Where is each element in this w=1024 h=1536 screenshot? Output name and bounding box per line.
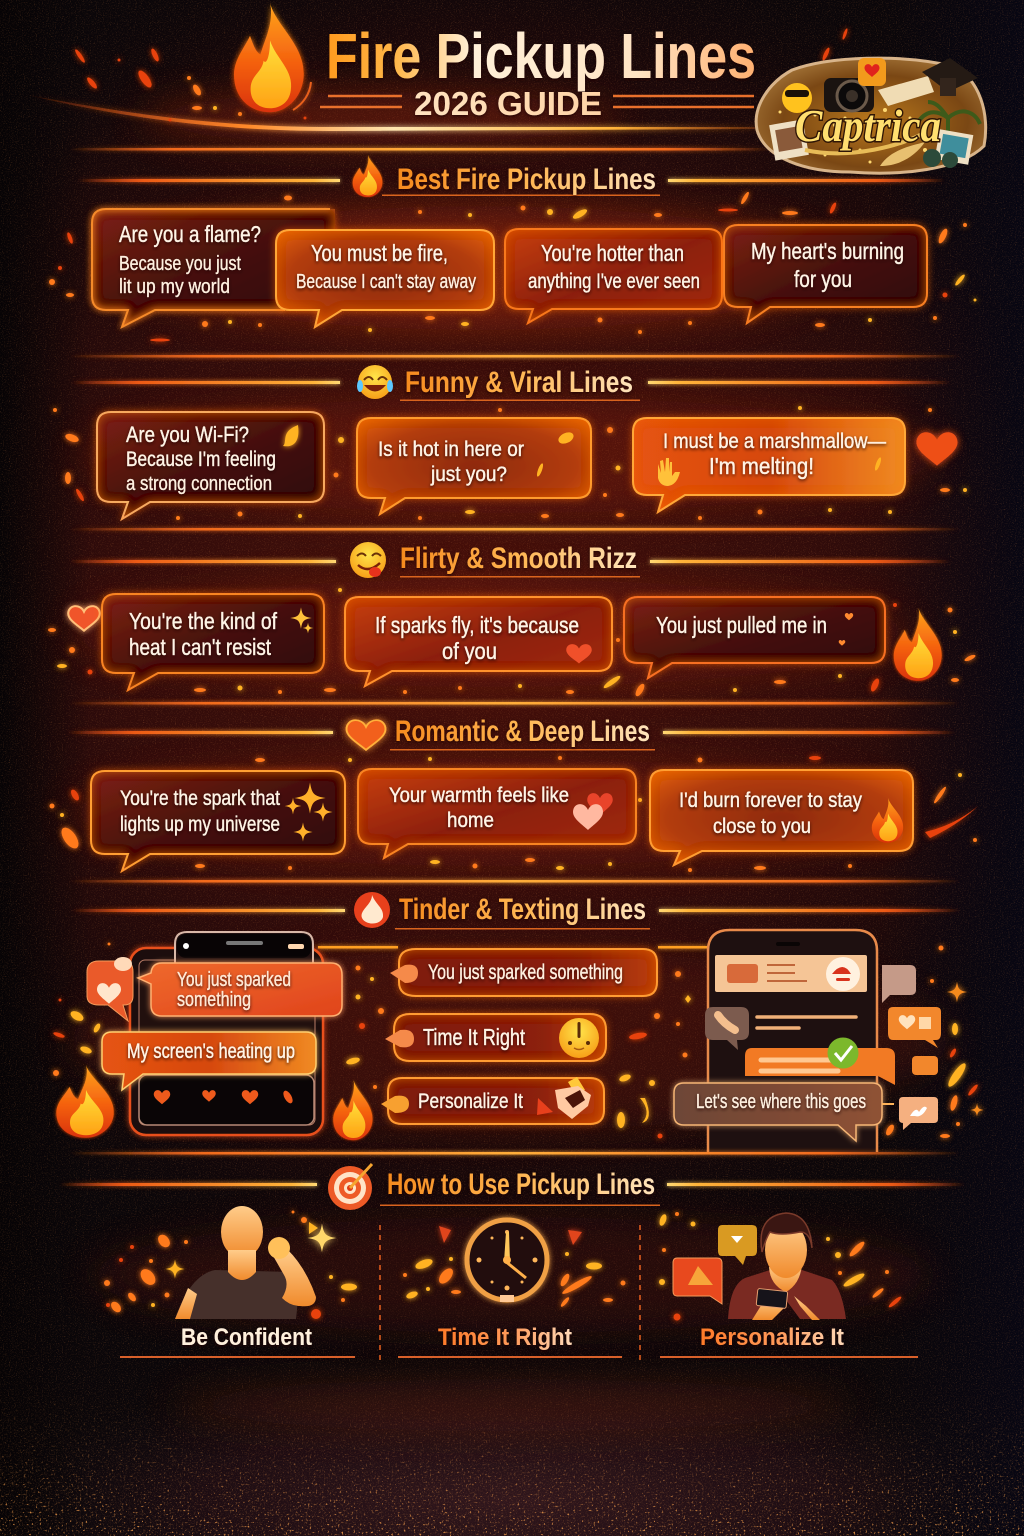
bubble: burn forever: I'd burn forever to stay [679,789,862,812]
divider [70,702,960,704]
swoosh line [28,95,760,131]
icon: main flame [234,3,311,112]
icon: phone call bubble [705,1007,749,1050]
bubble: middle 2 [385,1014,606,1061]
icon: alert emoji [559,1018,599,1058]
bubble: You just sparked something [138,963,342,1016]
section: Tinder & Texting Lines [53,880,984,1152]
hearts on phone [154,1089,295,1105]
label: Be Confident [181,1324,312,1351]
heading: How to Use Pickup Lines [387,1168,655,1201]
bubble: pulled me in: You just pulled me in [656,612,827,638]
subtitle: 2026 GUIDE [414,85,602,122]
heading [72,892,960,930]
bubble: My heart's burning [724,225,927,323]
bubble: My screen's heating up: My screen's heating up [127,1040,295,1063]
heading [68,715,955,750]
icon: hand [658,458,680,486]
heading [72,365,950,401]
heading [78,155,945,197]
bubble: warmth: home [447,809,494,832]
divider [70,880,960,882]
bubble: Are you Wi-Fi? [97,412,324,519]
icon: flame right [333,1080,372,1140]
bubble: You must be fire: Because I can't stay away [296,271,476,293]
bubble: middle 1: You just sparked something [428,961,623,984]
bubble: Let's see where this goes: Let's see where this goes [696,1091,866,1113]
title: Fire Pickup Lines [326,20,756,92]
label: Time It Right [438,1324,572,1351]
bubble: You just sparked something: something [177,989,251,1011]
column dividers [380,1225,640,1360]
logo: Captrica badge [756,58,986,173]
bubble: marshmallow: I'm melting! [709,453,814,479]
icon: check [828,1038,858,1068]
label: Personalize It [700,1324,844,1351]
bubble: kind of heat: You're the kind of [129,608,277,634]
divider [70,355,960,358]
embers [50,756,978,872]
bubble: You must be fire: You must be fire, [311,240,448,266]
embers [48,588,976,698]
embers [104,1210,902,1320]
bubble: pulled me in [624,597,885,678]
bubble: Is it hot in here: Is it hot in here or [378,438,524,461]
embers [53,942,984,1138]
embers [49,191,976,342]
bubble: sparks fly [345,597,612,686]
bubble: You just sparked something: You just sparked [177,969,291,991]
bubble: kind of heat [102,594,324,690]
bubble: My heart's burning: My heart's burning [751,238,904,264]
header section [28,3,770,150]
bubble: Are you Wi-Fi?: Because I'm feeling [126,448,276,471]
divider [70,528,960,530]
section: Best Fire Pickup Lines [49,155,976,342]
bubble: sparks fly: If sparks fly, it's because [375,612,579,638]
bubble: kind of heat: heat I can't resist [129,634,271,660]
person: Be Confident [165,1206,336,1319]
embers [53,406,967,520]
bubble: Are you a flame?: Are you a flame? [119,221,261,247]
bubble: warmth: Your warmth feels like [389,784,569,807]
logo icons [769,58,980,168]
logo wordmark: Captrica [795,100,941,151]
person: Personalize It [673,1213,846,1320]
subtitle [320,85,754,122]
bubble: You're hotter than [505,229,722,323]
heading [70,542,950,578]
icon: clock [467,1220,547,1302]
bubble: You must be fire [276,230,494,327]
bubble: marshmallow: I must be a marshmallow— [663,430,886,453]
bubble: Is it hot in here [357,418,591,514]
bubble: burn forever [650,770,913,865]
heading: Tinder & Texting Lines [399,893,646,926]
bubble: My screen's heating up [102,1032,316,1090]
bubble: warmth [358,769,636,858]
heading [60,1164,965,1210]
bubble: My heart's burning: for you [794,266,852,292]
divider [70,148,770,150]
bubble: Are you a flame?: lit up my world [119,276,230,298]
heading: Best Fire Pickup Lines [397,163,656,196]
icon: chat heart [87,957,133,1021]
bubble: Are you Wi-Fi?: Are you Wi-Fi? [126,422,249,447]
section: Funny & Viral Lines [53,355,967,520]
heading: Funny & Viral Lines [405,366,633,399]
bubble: burn forever: close to you [713,815,811,838]
divider [70,1152,960,1154]
bubble: Are you a flame?: Because you just [119,253,241,275]
section: Flirty & Smooth Rizz [48,528,976,698]
bubble: Is it hot in here: just you? [430,463,507,486]
icon: small heart [68,606,100,631]
bubble: You're hotter than: anything I've ever seen [528,270,700,293]
bubble: Let's see where this goes [674,1083,882,1141]
icon: heart [916,432,958,466]
bubble: spark universe: You're the spark that [120,787,280,810]
bubble: spark universe: lights up my universe [120,813,280,836]
phone: left [130,932,323,1135]
icon: envelope gift [537,1077,591,1119]
bubble: Are you a flame? [92,209,335,327]
icon: flame [894,608,942,681]
logo sparkles [778,98,927,164]
icon: flame left [56,1065,114,1138]
heading: Romantic & Deep Lines [395,715,650,748]
phone: right [708,930,877,1152]
bubble: sparks fly: of you [442,638,497,664]
bubble: middle 3 [381,1077,604,1124]
bubble: spark universe [91,771,345,871]
side chat icons [882,965,941,1130]
bubble: You're hotter than: You're hotter than [541,240,684,266]
heading: Flirty & Smooth Rizz [400,542,637,575]
bubble: middle 3: Personalize It [418,1090,523,1113]
bubble: marshmallow [633,418,905,512]
bubble: middle 2: Time It Right [423,1024,525,1050]
section: Romantic & Deep Lines [50,702,978,872]
bubble: middle 1 [390,949,657,996]
bubble: orange message [745,1048,895,1085]
bubble: Are you Wi-Fi?: a strong connection [126,473,272,495]
chat icons [673,1225,757,1304]
accent lines [318,946,708,948]
embers: header [74,28,848,121]
section: How to Use Pickup Lines [60,1152,965,1360]
